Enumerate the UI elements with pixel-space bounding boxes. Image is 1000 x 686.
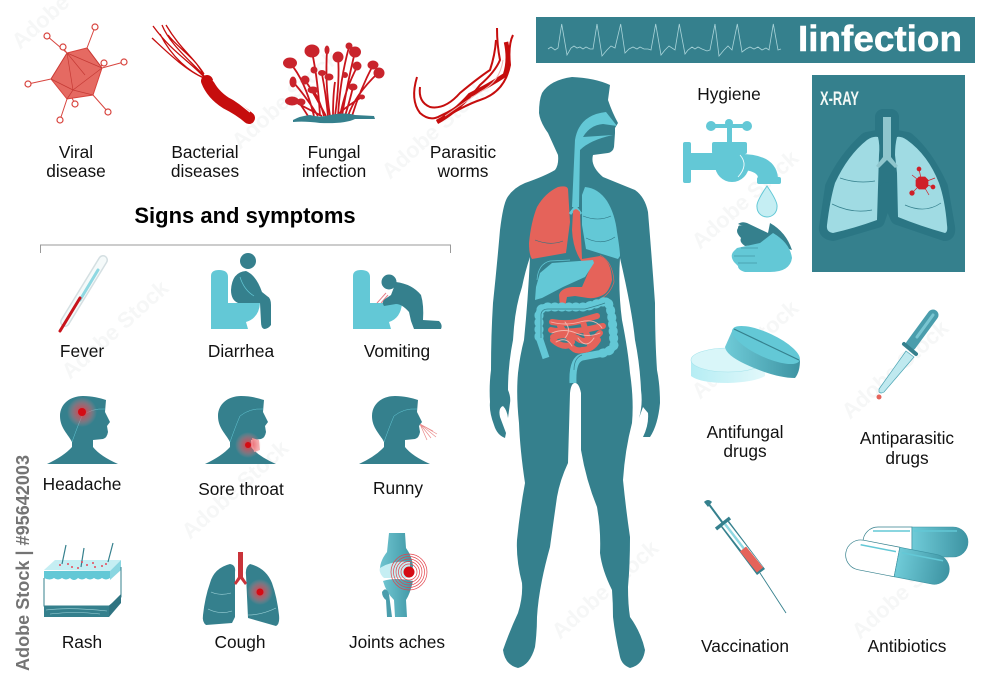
label: cough: Cough (215, 632, 265, 652)
icon: diarrhea (211, 253, 271, 329)
label: fungal infection: Fungal (308, 142, 360, 162)
colon inner line (541, 303, 605, 370)
icon: vaccination syringe (704, 500, 786, 613)
lung: healthy (582, 187, 620, 259)
label: antiparasitic drugs: Antiparasitic (860, 428, 954, 448)
label: sore throat: Sore throat (198, 479, 284, 499)
large intestine (539, 301, 614, 383)
esophagus and stomach (559, 209, 612, 307)
icon: headache (47, 396, 118, 464)
watermark: Adobe Stock (177, 435, 294, 544)
lung halo (827, 117, 947, 233)
watermark: Adobe Stock (227, 45, 344, 154)
small intestine (551, 316, 603, 350)
label: antifungal drugs: Antifungal (707, 422, 783, 442)
watermark: Adobe Stock (377, 75, 494, 184)
label: antiparasitic drugs: drugs (885, 448, 929, 468)
icon: viral disease (25, 24, 127, 123)
heading: signs and symptoms: Signs and symptoms (134, 203, 356, 228)
label: runny: Runny (373, 478, 423, 498)
icon: hygiene faucet (683, 119, 781, 184)
x-ray right lung (895, 137, 947, 233)
back capsule (863, 527, 968, 557)
icon: parasitic worms (414, 28, 513, 122)
icon: runny nose (359, 396, 437, 464)
label: rash: Rash (62, 632, 102, 652)
label: antifungal drugs: drugs (723, 441, 767, 461)
label: bacterial diseases: diseases (171, 161, 239, 181)
icon: rash skin layers (44, 543, 121, 617)
label: fever: Fever (60, 341, 104, 361)
human body with organs (490, 77, 660, 668)
label: bacterial diseases: Bacterial (171, 142, 239, 162)
airway and pharynx (572, 112, 617, 207)
body silhouette (490, 77, 660, 668)
lung: infected, red (529, 186, 570, 259)
trachea fork (570, 200, 581, 214)
label: diarrhea: Diarrhea (208, 341, 275, 361)
watermark: Adobe Stock (837, 315, 954, 424)
label: hygiene: Hygiene (697, 84, 761, 104)
icon: antifungal tablets (691, 318, 805, 383)
label: parasitic worms: Parasitic (430, 142, 496, 162)
x-ray left lung (827, 137, 879, 233)
lung fissures (535, 216, 615, 243)
stomach outline (598, 255, 614, 300)
x-ray trachea (876, 117, 898, 168)
label: parasitic worms: worms (437, 161, 489, 181)
icon: antibiotics capsules (843, 527, 968, 587)
vertical stock credit: Adobe Stock | #95642003 (13, 455, 33, 671)
label: vomiting: Vomiting (364, 341, 430, 361)
label: viral disease: Viral (59, 142, 93, 162)
title banner (536, 17, 975, 63)
icon: water drop (757, 186, 777, 217)
icon: bacterial diseases (152, 25, 250, 118)
icon: antiparasitic dropper (876, 315, 933, 400)
label: antibiotics: Antibiotics (868, 636, 947, 656)
panel: x-ray (812, 75, 965, 272)
label: viral disease: disease (46, 161, 106, 181)
label: headache: Headache (43, 474, 121, 494)
watermark: Adobe Stock (547, 535, 664, 644)
icon: washing hands (732, 222, 792, 272)
icon: fungal infection (283, 42, 384, 123)
liver (535, 260, 594, 300)
label: vaccination: Vaccination (701, 636, 789, 656)
title banner: Iinfection (798, 18, 962, 59)
watermark: Adobe Stock (847, 535, 964, 644)
watermark: Adobe Stock (57, 275, 174, 384)
colon haustra (539, 301, 614, 354)
label: fungal infection: infection (302, 161, 366, 181)
icon: fever thermometer (60, 260, 103, 331)
icon: joint aches knee (380, 533, 427, 617)
icon: sore throat (205, 396, 276, 464)
front capsule (843, 537, 952, 587)
bracket (40, 245, 450, 253)
watermark: Adobe Stock (687, 145, 804, 254)
watermark: Adobe Stock (687, 295, 804, 404)
icon: vomiting (353, 270, 442, 329)
x-ray label: X-RAY (820, 89, 859, 110)
icon: cough lungs (203, 552, 279, 626)
label: joints aches: Joints aches (349, 632, 445, 652)
lung lines (832, 178, 941, 211)
liver outline (537, 260, 570, 280)
x-ray virus (910, 167, 935, 195)
